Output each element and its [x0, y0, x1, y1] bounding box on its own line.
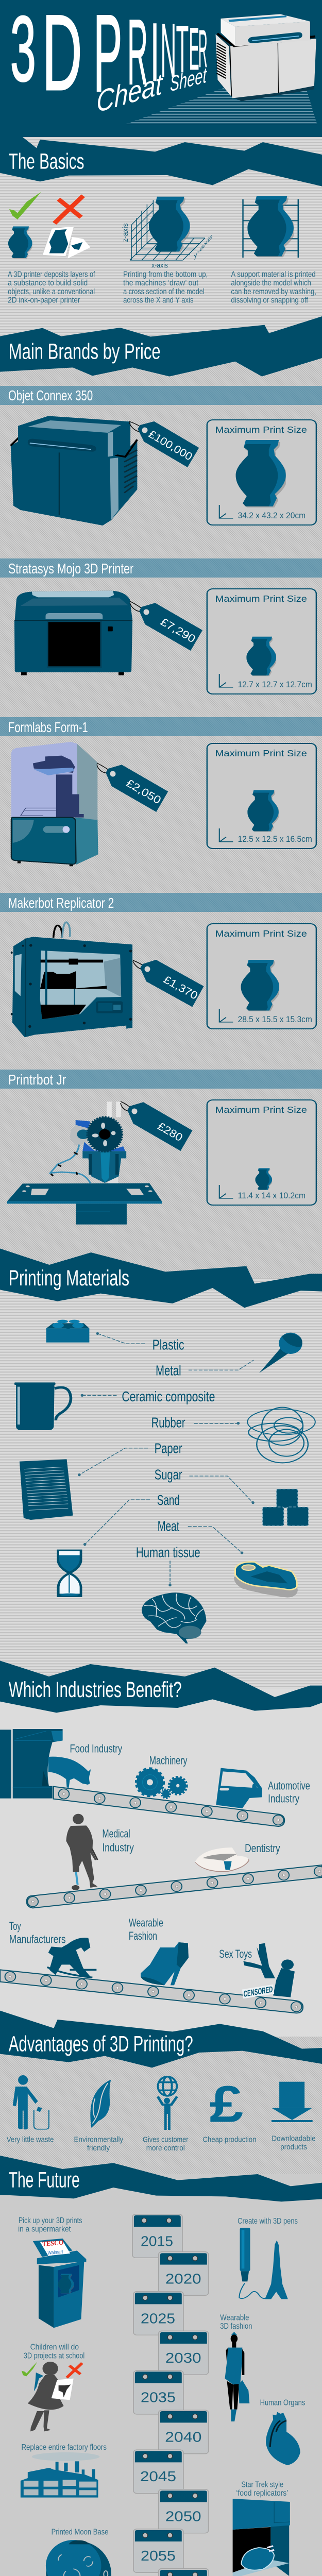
icon: gears — [137, 1769, 186, 1798]
price tag: £100,000 — [134, 416, 199, 467]
label: Rubber: Rubber — [151, 1414, 185, 1431]
panel: advantages — [7, 2075, 316, 2153]
text: Replace entire factory floors: Replace entire factory floors — [21, 2443, 107, 2452]
label: Human tissue: Human tissue — [136, 1544, 200, 1561]
bar: Stratasys Mojo 3D Printer: Stratasys Mojo 3D Printer — [8, 561, 133, 577]
icon: download arrow — [272, 2082, 313, 2122]
label: Food Industry: Food Industry — [70, 1743, 123, 1755]
conveyor belt 1 — [54, 1787, 284, 1826]
calendar 2045: 2045 — [140, 2468, 176, 2484]
text: Printed Moon Base: Printed Moon Base — [52, 2528, 108, 2536]
heading: Which Industries Benefit?: Which Industries Benefit? — [9, 1677, 182, 1702]
band: The Basics — [0, 137, 322, 187]
text: basics column 1: 2D ink-on-paper printer — [8, 295, 80, 304]
icon: woman in printed dress — [225, 2332, 249, 2421]
icon: brain — [142, 1592, 207, 1643]
calendar 2025: 2025 — [141, 2310, 175, 2327]
title: 3 — [10, 0, 36, 101]
stamp: CENSORED: CENSORED — [244, 1984, 273, 1999]
label: Machinery: Machinery — [149, 1754, 188, 1767]
icon: supermarket kiosk — [33, 2239, 86, 2328]
label: Dentistry: Dentistry — [245, 1842, 280, 1855]
price tag: £1,370: £1,370 — [161, 974, 200, 1002]
label: Medical Industry — [103, 1828, 134, 1854]
price tag: £100,000: £100,000 — [146, 428, 194, 463]
heading: Main Brands by Price: Main Brands by Price — [9, 340, 161, 364]
calendar 2040: 2040 — [165, 2429, 201, 2445]
heading: Printing Materials: Printing Materials — [9, 1266, 129, 1291]
text: Star Trek style — [236, 2480, 288, 2498]
panel: print size Makerbot: Maximum Print Size — [215, 929, 307, 939]
connector: human tissue — [169, 1561, 171, 1585]
icon: heart organ — [266, 2412, 300, 2465]
icon: Printrbot extruder — [7, 1101, 162, 1225]
text: Pick up your 3D prints — [18, 2216, 82, 2233]
conveyor belt 2 — [27, 1865, 322, 1908]
calendar 2035: 2035 — [141, 2389, 176, 2405]
label: Sex Toys: Sex Toys — [219, 1948, 252, 1960]
text: basics column 2: the machines ‘draw’ out — [123, 278, 198, 287]
title: Cheat — [96, 66, 163, 119]
caption: Cheap production: Cheap production — [202, 2135, 256, 2144]
price tag: £1,370 — [136, 955, 204, 1007]
label: Automotive Industry: Industry — [268, 1792, 300, 1805]
text: basics column 2: across the X and Y axis — [123, 295, 193, 304]
icon: sugar cubes — [262, 1489, 309, 1526]
icon: person holding globe — [158, 2077, 177, 2130]
icon: metal pin — [259, 1333, 302, 1373]
caption: Gives customer more control — [143, 2135, 189, 2153]
icon: Formlabs printer — [11, 742, 98, 866]
icon: child with check and cross — [22, 2362, 82, 2431]
panel: print size Formlabs — [207, 743, 316, 849]
panel: print size Objet: 34.2 x 43.2 x 20cm — [238, 511, 306, 520]
icon: leaf — [90, 2080, 111, 2128]
icon: supermarket kiosk: Walmart — [47, 2249, 63, 2256]
tag string: Formlabs — [97, 763, 113, 774]
icon: Objet printer — [11, 416, 137, 526]
icon: paper printouts — [43, 226, 90, 259]
caption: Downloadable products: products — [280, 2142, 307, 2151]
label: Wearable Fashion — [129, 1917, 163, 1942]
label: Toy Manufacturers: Manufacturers — [9, 1934, 66, 1946]
panel: print size Objet: Maximum Print Size — [215, 425, 307, 435]
floor shadow stripes under header printer — [123, 88, 317, 125]
label: Medical Industry: Industry — [103, 1841, 134, 1854]
connector: paper — [80, 1448, 148, 1475]
label: Medical Industry: Medical — [103, 1828, 130, 1840]
icon: paper sheet — [20, 1459, 73, 1520]
icon: mug — [14, 1382, 71, 1430]
icon: red cross — [55, 196, 83, 223]
bar: Objet Connex 350 — [0, 386, 322, 405]
heading: Advantages of 3D Printing?: Advantages of 3D Printing? — [9, 2032, 193, 2057]
band: Main Brands by Price — [0, 316, 322, 377]
icon: printer nozzle — [0, 1729, 63, 1799]
bar: Objet Connex 350: Objet Connex 350 — [8, 387, 93, 403]
connector: sand — [85, 1500, 150, 1545]
timeline: calendars — [132, 2214, 209, 2576]
caption: Environmentally friendly: friendly — [87, 2143, 110, 2153]
text: Wearable 3D fashion: Wearable — [220, 2313, 249, 2322]
title: Sheet — [170, 63, 207, 96]
calendar 2020: 2020 — [165, 2270, 201, 2287]
label: Ceramic composite: Ceramic composite — [122, 1388, 215, 1404]
calendar 2025 — [133, 2292, 183, 2335]
label: Plastic: Plastic — [152, 1336, 184, 1353]
icon: hourglass — [57, 1550, 82, 1597]
panel: print size Objet — [207, 420, 316, 525]
bar: Formlabs Form-1 — [0, 717, 322, 736]
calendar 2055 — [133, 2529, 183, 2572]
icon: person with bin — [13, 2075, 49, 2129]
calendar 2060 — [159, 2568, 209, 2576]
band: Which Industries Benefit? — [0, 1660, 322, 1713]
caption: Environmentally friendly — [74, 2135, 124, 2153]
icon: rubber bands — [247, 1408, 315, 1463]
connector: metal — [189, 1360, 253, 1370]
icon: green check — [9, 192, 41, 219]
icon: legs — [243, 1943, 295, 1997]
price tag: £2,050 — [101, 760, 168, 812]
text: Children will do: 3D projects at school — [24, 2351, 84, 2360]
calendar 2040 — [159, 2410, 209, 2454]
title: N — [161, 7, 176, 93]
icon: car door — [216, 1768, 262, 1808]
price tag: £7,290: £7,290 — [158, 616, 197, 645]
calendar 2055: 2055 — [141, 2548, 176, 2564]
calendar 2030: 2030 — [165, 2350, 201, 2366]
text: Star Trek style: Star Trek style — [241, 2480, 283, 2489]
text: basics column 1: a substance to build solid — [8, 278, 88, 287]
text: basics column 1: objects, unlike a conventional — [8, 286, 95, 296]
text: basics column 3 — [231, 269, 316, 304]
label: Wearable Fashion: Wearable — [129, 1917, 163, 1929]
label: x-axis: x-axis — [151, 262, 168, 269]
panel: print size Printrbot: Maximum Print Size — [215, 1105, 307, 1115]
text: Children will do — [24, 2343, 84, 2360]
tag string: Printrbot — [121, 1101, 134, 1111]
text: Children will do: Children will do — [30, 2343, 79, 2351]
calendar 2030 — [159, 2331, 209, 2375]
icon: pig — [48, 1757, 91, 1788]
label: Sand: Sand — [157, 1492, 180, 1508]
icon: food replicator — [233, 2499, 290, 2576]
caption: Environmentally friendly: Environmentally — [74, 2135, 124, 2144]
label: Meat: Meat — [158, 1518, 179, 1534]
bar: Printrbot Jr: Printrbot Jr — [8, 1072, 66, 1088]
text: E — [189, 15, 199, 82]
panel: industries — [0, 1729, 322, 1960]
bar: Makerbot Replicator 2: Makerbot Replicator 2 — [8, 895, 114, 911]
price tag: £280: £280 — [156, 1120, 184, 1144]
label: Paper: Paper — [155, 1440, 182, 1456]
icon: xyz grid — [130, 200, 205, 260]
text: Star Trek style: ‘food replicators’ — [236, 2488, 288, 2498]
price tag: £2,050: £2,050 — [124, 777, 163, 806]
label: Wearable Fashion: Fashion — [129, 1930, 157, 1942]
text: basics column 1: A 3D printer deposits layers of — [8, 269, 95, 279]
connector: sugar — [190, 1476, 253, 1503]
icon: factory — [21, 2452, 99, 2498]
caption: Downloadable products — [272, 2134, 316, 2151]
calendar 2045 — [133, 2450, 183, 2494]
panel: print size Printrbot: 11.4 x 14 x 10.2cm — [238, 1191, 306, 1200]
label: Sugar: Sugar — [155, 1466, 182, 1483]
text: basics column 2 — [123, 269, 208, 304]
text: basics column 1 — [8, 269, 95, 304]
bar: Formlabs Form-1: Formlabs Form-1 — [8, 719, 88, 735]
calendar 2015 — [132, 2214, 182, 2258]
tag string: Objet — [129, 421, 145, 432]
calendar 2050 — [159, 2489, 209, 2533]
icon: header printer — [216, 14, 316, 101]
icon: 3D vase — [8, 226, 33, 259]
panel: future predictions — [18, 2216, 305, 2465]
title — [10, 0, 208, 119]
panel: print size Stratasys: Maximum Print Size — [215, 594, 307, 604]
text: R — [198, 19, 208, 79]
panel: print size Makerbot — [207, 924, 316, 1029]
title: R — [127, 1, 148, 104]
connector: ceramic — [82, 1394, 117, 1396]
tag string: Makerbot — [133, 960, 147, 970]
caption: Very little waste: Very little waste — [7, 2135, 54, 2144]
tag string: Stratasys — [130, 601, 146, 612]
text: Pick up your 3D prints: in a supermarket — [18, 2225, 71, 2233]
label: z-axis: z-axis — [121, 223, 129, 242]
icon: dental teeth — [195, 1848, 249, 1872]
bar: Stratasys Mojo 3D Printer — [0, 558, 322, 578]
icon: soldier with prosthetic leg — [66, 1814, 97, 1890]
band: Advantages of 3D Printing? — [0, 2011, 322, 2067]
caption: Gives customer more control: more control — [146, 2143, 185, 2153]
panel: print size Printrbot — [207, 1100, 316, 1205]
label: Metal: Metal — [156, 1362, 181, 1379]
icon: 3D pen and Eiffel tower — [239, 2228, 288, 2299]
price tag: £7,290 — [135, 598, 202, 651]
panel: print size Stratasys — [207, 589, 316, 694]
icon: plastic brick — [46, 1320, 89, 1343]
icon: high heel boot — [141, 1942, 189, 1985]
caption: Gives customer more control: Gives customer — [143, 2135, 189, 2144]
icon: supermarket kiosk: TESCO — [42, 2239, 64, 2248]
band: Printing Materials — [0, 1248, 322, 1308]
title: T — [176, 12, 189, 87]
band: The Future — [0, 2156, 322, 2201]
text: basics column 2: a cross section of the model — [123, 286, 205, 296]
conveyor belt 3 with toys — [0, 1938, 303, 2013]
label: Toy Manufacturers — [9, 1920, 66, 1946]
panel: materials — [14, 1320, 315, 1520]
icon: moon base — [46, 2540, 111, 2576]
bar: Makerbot Replicator 2 — [0, 893, 322, 912]
text: Pick up your 3D prints: Pick up your 3D prints — [19, 2216, 82, 2225]
connector: meat — [188, 1527, 242, 1553]
calendar 2020 — [159, 2252, 209, 2295]
icon: Makerbot printer — [11, 922, 132, 1037]
text: Wearable 3D fashion — [220, 2313, 252, 2331]
calendar 2035 — [133, 2370, 183, 2414]
label: Toy Manufacturers: Toy — [9, 1920, 21, 1933]
panel: basics icons — [8, 192, 298, 269]
heading: The Future: The Future — [9, 2168, 80, 2193]
connector: plastic — [97, 1333, 145, 1344]
title: I — [150, 6, 159, 98]
icon: rocking horse — [47, 1938, 96, 1977]
icon: support scaffold — [243, 199, 298, 258]
text: Create with 3D pens: Create with 3D pens — [238, 2216, 298, 2226]
icon: pound sign: £ — [210, 2076, 243, 2133]
icon: steak — [234, 1562, 298, 1598]
stamp: CENSORED — [242, 1984, 274, 1999]
label: Automotive Industry — [268, 1780, 310, 1805]
price tag: £280 — [123, 1097, 192, 1151]
heading: The Basics: The Basics — [9, 149, 84, 174]
calendar 2015: 2015 — [141, 2233, 173, 2249]
connector: rubber — [194, 1422, 238, 1425]
text: basics column 2: Printing from the bottom up, — [123, 269, 208, 279]
text: Wearable 3D fashion: 3D fashion — [220, 2321, 252, 2331]
bar: Printrbot Jr — [0, 1070, 322, 1089]
icon: Stratasys printer — [14, 591, 132, 675]
calendar 2050: 2050 — [165, 2508, 201, 2524]
label: y-axis: y-axis — [194, 231, 213, 260]
panel: print size Formlabs: Maximum Print Size — [215, 749, 307, 759]
panel: future lower — [8, 2452, 318, 2576]
